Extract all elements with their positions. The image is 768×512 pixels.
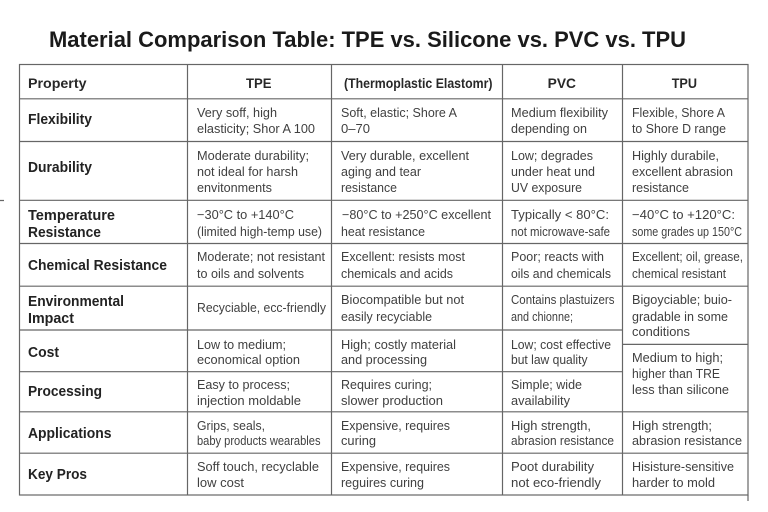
cell: PVC processing — [511, 377, 582, 408]
label: Temperature Resistance: Temperature — [28, 208, 115, 224]
cell: TPE durability: not ideal for harsh — [197, 164, 298, 179]
cell: Silicone applications — [341, 418, 450, 448]
cell: Silicone applications: curing — [341, 433, 376, 448]
cell: TPU applications — [632, 418, 742, 448]
cell: TPU temperature: −40°C to +120°C: — [632, 207, 735, 222]
cell: PVC cost: Low; cost effective — [511, 337, 611, 352]
cell: PVC durability: Low; degrades — [511, 148, 593, 163]
cell: Silicone processing: slower production — [341, 393, 443, 408]
header row — [28, 76, 697, 91]
cell: PVC processing: availability — [511, 393, 571, 408]
header: Property: Property — [28, 76, 87, 91]
row: Applications — [28, 418, 742, 448]
cell: TPE chemical: to oils and solvents — [197, 266, 304, 281]
cell: TPU chemical: chemical resistant — [632, 266, 726, 281]
cell: PVC temperature: Typically < 80°C: — [511, 207, 609, 222]
cell: PVC flexibility: depending on — [511, 121, 587, 136]
cell: PVC flexibility: Medium flexibility — [511, 105, 609, 120]
cell: PVC cost: but law quality — [511, 352, 588, 367]
cell: TPU cost — [632, 350, 729, 397]
header: TPU: TPU — [672, 76, 697, 91]
cell: PVC applications — [511, 418, 614, 448]
cell: PVC environmental: and chionne; — [511, 309, 573, 324]
cell: PVC cost — [511, 337, 611, 367]
cell: PVC temperature: not microwave-safe — [511, 224, 610, 239]
label: Cost: Cost — [28, 345, 59, 361]
cell: Silicone chemical — [341, 249, 465, 281]
cell: TPE flexibility: Very soff, high — [197, 105, 277, 120]
cell: TPU flexibility — [632, 105, 726, 136]
cell: TPE flexibility — [197, 105, 315, 136]
cell: Silicone environmental: Biocompatible but not — [341, 292, 464, 307]
label: Flexibility: Flexibility — [28, 112, 92, 128]
cell: TPU environmental: conditions — [632, 324, 690, 339]
cell: TPE cost — [197, 337, 300, 367]
cell: TPE durability: Moderate durability; — [197, 148, 309, 163]
cell: TPU cost: higher than TRE — [632, 366, 720, 381]
cell: Silicone chemical: chemicals and acids — [341, 266, 453, 281]
cell: TPU key pros — [632, 459, 734, 490]
row: Cost — [28, 337, 729, 397]
cell: Silicone processing: Requires curing; — [341, 377, 432, 392]
cell: TPU durability: Highly durabile, — [632, 148, 719, 163]
cell: PVC applications: High strength, — [511, 418, 591, 433]
cell: PVC environmental — [511, 292, 614, 324]
label: Temperature Resistance: Resistance — [28, 225, 101, 241]
cell: Silicone environmental: easily recyciable — [341, 309, 432, 324]
cell: Silicone key pros: reguires curing — [341, 475, 424, 490]
cell: Silicone key pros: Expensive, requires — [341, 459, 450, 474]
cell: TPE cost: Low to medium; — [197, 337, 286, 352]
cell: PVC environmental: Contains plastuizers — [511, 292, 614, 307]
cell: TPE processing — [197, 377, 301, 408]
cell: Silicone durability: Very durable, excellent — [341, 148, 469, 163]
row: Processing — [28, 377, 582, 408]
cell: Silicone environmental — [341, 292, 464, 324]
cell: TPU environmental: gradable in some — [632, 309, 728, 324]
row: Chemical Resistance — [28, 249, 743, 281]
cell: TPU durability: resistance — [632, 180, 689, 195]
cell: PVC durability — [511, 148, 595, 195]
row: Environmental Impact — [28, 292, 732, 339]
label: Processing: Processing — [28, 384, 102, 400]
cell: TPE key pros — [197, 459, 319, 490]
row: Key Pros — [28, 459, 734, 490]
cell: TPE processing: Easy to process; — [197, 377, 290, 392]
cell: TPE durability — [197, 148, 309, 195]
row: Flexibility — [28, 105, 726, 136]
cell: TPE cost: economical option — [197, 352, 300, 367]
cell: TPU durability — [632, 148, 733, 195]
cell: TPU flexibility: Flexible, Shore A — [632, 105, 725, 120]
cell: Silicone flexibility: 0–70 — [341, 121, 370, 136]
cell: TPU cost: Medium to high; — [632, 350, 723, 365]
cell: PVC key pros — [511, 459, 602, 490]
cell: TPU durability: excellent abrasion — [632, 164, 733, 179]
cell: Silicone cost: High; costly material — [341, 337, 456, 352]
cell: TPU environmental — [632, 292, 732, 339]
cell: TPU key pros: Hisisture-sensitive — [632, 459, 734, 474]
cell: PVC durability: UV exposure — [511, 180, 582, 195]
cell: TPU applications: abrasion resistance — [632, 433, 742, 448]
label: Applications: Applications — [28, 426, 112, 442]
cell: Silicone flexibility: Soft, elastic; Shore A — [341, 105, 457, 120]
cell: Silicone durability: resistance — [341, 180, 397, 195]
cell: PVC chemical: Poor; reacts with — [511, 249, 604, 264]
cell: TPU temperature: some grades up 150°C — [632, 224, 742, 239]
cell: TPU environmental: Bigoyciable; buio- — [632, 292, 732, 307]
cell: Silicone durability — [341, 148, 469, 195]
cell: TPE temperature — [197, 207, 322, 239]
cell: Silicone temperature: heat resistance — [341, 224, 425, 239]
cell: Silicone temperature — [341, 207, 491, 239]
cell: TPE key pros: Soff touch, recyclable — [197, 459, 319, 474]
header: PVC: PVC — [548, 76, 576, 91]
cell: TPE flexibility: elasticity; Shor A 100 — [197, 121, 315, 136]
cell: TPE chemical: Moderate; not resistant — [197, 249, 325, 264]
cell: Silicone chemical: Excellent: resists most — [341, 249, 465, 264]
cell: TPE applications: Grips, seals, — [197, 418, 265, 433]
cell: TPU chemical — [632, 249, 743, 281]
cell: Silicone processing — [341, 377, 443, 408]
cell: TPE durability: envitonments — [197, 180, 272, 195]
cell: PVC chemical — [511, 249, 611, 281]
cell: PVC applications: abrasion resistance — [511, 433, 614, 448]
cell: PVC durability: under heat und — [511, 164, 595, 179]
cell: PVC processing: Simple; wide — [511, 377, 582, 392]
label: Environmental Impact: Impact — [28, 311, 74, 327]
label: Environmental Impact: Environmental — [28, 294, 124, 310]
header: Thermoplastic Elastomer: (Thermoplastic Elastomr) — [344, 76, 492, 91]
row: Temperature Resistance — [28, 207, 742, 241]
cell: Silicone cost — [341, 337, 456, 367]
cell: TPU temperature — [632, 207, 742, 239]
title: Material Comparison Table: TPE vs. Silicone vs. PVC vs. TPU — [49, 27, 686, 52]
cell: TPE processing: injection moldable — [197, 393, 301, 408]
label: Temperature Resistance — [28, 208, 115, 241]
cell: PVC temperature — [511, 207, 610, 239]
label: Chemical Resistance: Chemical Resistance — [28, 258, 167, 274]
cell: Silicone temperature: −80°C to +250°C excellent — [342, 207, 491, 222]
cell: TPE applications: baby products wearables — [197, 433, 320, 448]
cell: PVC chemical: oils and chemicals — [511, 266, 611, 281]
row: Durability — [28, 148, 733, 195]
cell: Silicone cost: and processing — [341, 352, 427, 367]
cell: Silicone applications: Expensive, requires — [341, 418, 450, 433]
cell: TPE applications — [197, 418, 320, 448]
cell: PVC key pros: Poot durability — [511, 459, 595, 474]
cell: TPU applications: High strength; — [632, 418, 712, 433]
cell: Silicone flexibility — [341, 105, 457, 136]
label: Durability: Durability — [28, 160, 92, 176]
label: Key Pros: Key Pros — [28, 467, 87, 483]
cell: Silicone durability: aging and tear — [341, 164, 422, 179]
cell: TPE chemical — [197, 249, 325, 281]
label: Environmental Impact — [28, 294, 124, 327]
header: TPE: TPE — [246, 76, 272, 91]
cell: Silicone key pros — [341, 459, 450, 490]
cell: TPU flexibility: to Shore D range — [632, 121, 726, 136]
cell: TPE temperature: −30°C to +140°C — [197, 207, 294, 222]
cell: TPU cost: less than silicone — [632, 382, 729, 397]
cell: TPE temperature: (limited high-temp use) — [197, 224, 322, 239]
cell: TPE environmental: Recyciable, ecc-friendly — [197, 300, 327, 315]
cell: PVC flexibility — [511, 105, 609, 136]
cell: TPU chemical: Excellent; oil, grease, — [632, 249, 743, 264]
cell: PVC key pros: not eco-friendly — [511, 475, 602, 490]
cell: TPU key pros: harder to mold — [632, 475, 715, 490]
cell: TPE key pros: low cost — [197, 475, 244, 490]
